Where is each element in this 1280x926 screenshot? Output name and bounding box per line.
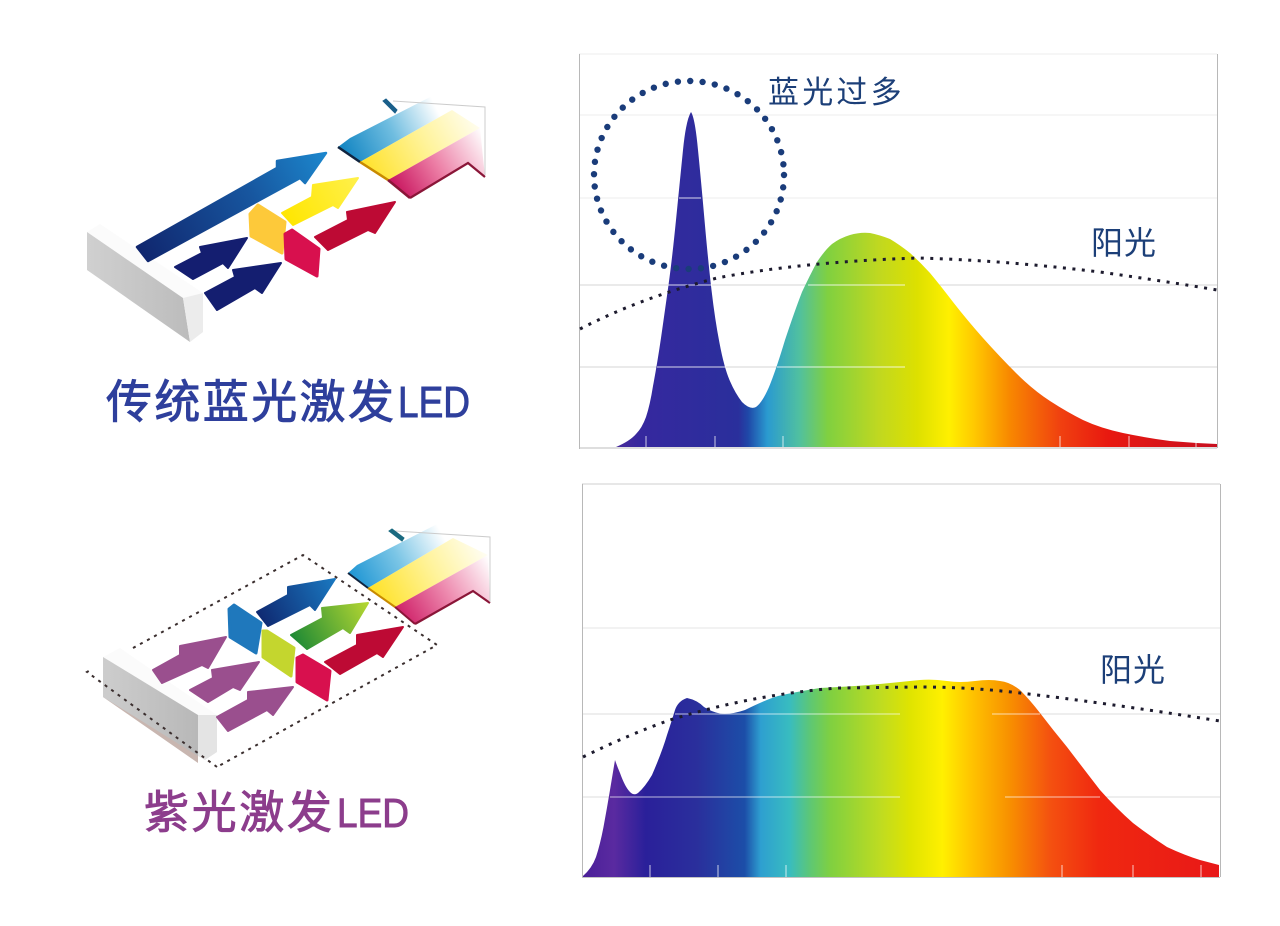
chart: blue-excited LED spectrum <box>579 54 1218 449</box>
spectrum curve <box>616 112 1217 447</box>
heading: traditional blue-excited LED: 传统蓝光激发 <box>106 376 394 428</box>
yellow arrow <box>282 178 358 225</box>
white grid lines over curve <box>657 198 905 367</box>
red arrow <box>325 627 403 674</box>
dashed outline: lower edge <box>87 669 217 767</box>
sunlight dotted curve <box>580 258 1217 329</box>
axis ticks <box>650 865 1201 877</box>
spectrum curve <box>583 680 1219 877</box>
green arrow <box>291 603 368 649</box>
chart frame and grid <box>579 54 1218 449</box>
heading: violet-excited LED: 紫光激发 <box>144 787 332 838</box>
heading: traditional blue-excited LED: LED <box>398 378 470 427</box>
chart: violet-excited LED spectrum <box>582 484 1220 878</box>
white grid lines over curve <box>610 714 1100 797</box>
axis ticks <box>646 436 1196 447</box>
heading: violet-excited LED: LED <box>337 790 409 836</box>
purple arrow 1 <box>153 637 226 683</box>
blue phosphor block <box>229 605 261 653</box>
green phosphor block <box>263 631 294 676</box>
purple arrow 3 <box>217 687 293 731</box>
dark blue arrow 2 <box>205 263 281 310</box>
LED chip block <box>103 648 217 763</box>
blue arrow <box>257 579 335 626</box>
label: excess blue light: 蓝光过多 <box>768 75 905 110</box>
purple arrow 2 <box>190 662 259 702</box>
red phosphor block <box>285 230 319 276</box>
excess blue dotted circle <box>594 81 784 269</box>
long blue arrow <box>137 153 326 261</box>
white output arrow with colour bands <box>348 520 490 624</box>
red phosphor block <box>297 655 330 700</box>
diagram: traditional blue-excited LED <box>87 92 485 342</box>
white output arrow with colour bands <box>338 92 485 198</box>
LED chip block <box>87 224 203 342</box>
diagram: violet-excited LED <box>87 520 490 767</box>
label: sunlight: 阳光 <box>1100 652 1166 688</box>
red arrow <box>315 202 395 250</box>
yellow phosphor block <box>250 205 285 253</box>
dark blue arrow 1 <box>175 238 247 279</box>
label: sunlight: 阳光 <box>1091 225 1157 261</box>
chart frame and grid <box>582 484 1220 878</box>
sunlight dotted curve <box>583 687 1220 757</box>
dashed outline: upper edges <box>133 555 437 767</box>
